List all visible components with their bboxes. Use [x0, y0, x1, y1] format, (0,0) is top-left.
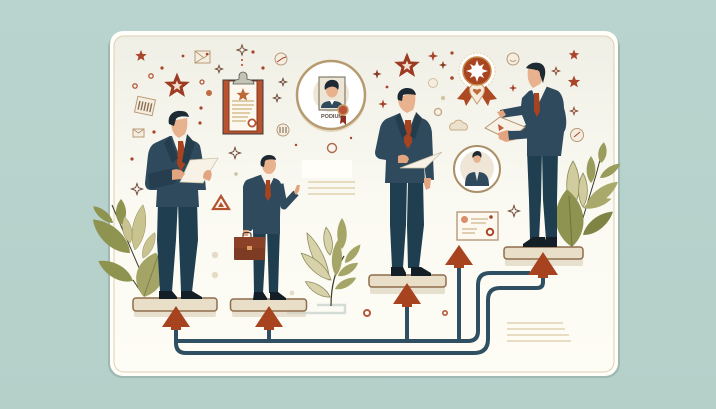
- text block: placeholder lines middle: [302, 160, 355, 194]
- certificate card: [457, 212, 498, 240]
- icon: face bubble: [507, 53, 519, 65]
- label: podium: PODIUM: [321, 114, 343, 120]
- icon: clipboard: [223, 72, 263, 134]
- icon: envelope: [195, 51, 210, 63]
- icon: face bubble lower: [570, 128, 584, 142]
- icon: cloud: [450, 120, 467, 130]
- icon: ticket: [135, 96, 155, 116]
- icon: chat bubble bars: [277, 124, 289, 136]
- small portrait circle: [454, 146, 500, 192]
- decorative icons: sparkles and dots: [130, 45, 578, 316]
- platform 2: [230, 299, 306, 311]
- medal portrait circle: [296, 61, 366, 132]
- plant: middle: [287, 218, 363, 313]
- platform shadows: [134, 258, 583, 317]
- connector lines: [176, 262, 543, 353]
- briefcase: [234, 232, 265, 260]
- decorative icons: small outlined glyphs: [133, 51, 584, 142]
- text block: placeholder lines lower right: [507, 323, 571, 341]
- platform 4: [504, 247, 583, 259]
- platform 3: [369, 275, 446, 287]
- person 2: [234, 155, 300, 300]
- plant: right: [553, 142, 623, 248]
- panel: main card: [108, 31, 620, 378]
- arrow 5: [528, 252, 558, 278]
- ribbon badge: [457, 53, 497, 106]
- plant: left: [87, 199, 169, 300]
- arrow 2: [255, 306, 283, 330]
- platforms: [133, 247, 583, 311]
- platform 1: [133, 298, 217, 311]
- decorative icons: stars: [135, 50, 580, 97]
- person 3: [375, 88, 442, 276]
- icon: ring: [434, 108, 442, 116]
- person 1: [145, 111, 218, 299]
- icon: small face: [428, 78, 438, 88]
- arrow 3: [393, 283, 421, 307]
- arrow 1: [162, 306, 190, 330]
- icon: chat bubble chart: [275, 53, 287, 65]
- icon: small envelope: [133, 129, 144, 137]
- triangle icon: [213, 196, 229, 209]
- arrow 4: [445, 245, 473, 268]
- person 4: [485, 63, 566, 247]
